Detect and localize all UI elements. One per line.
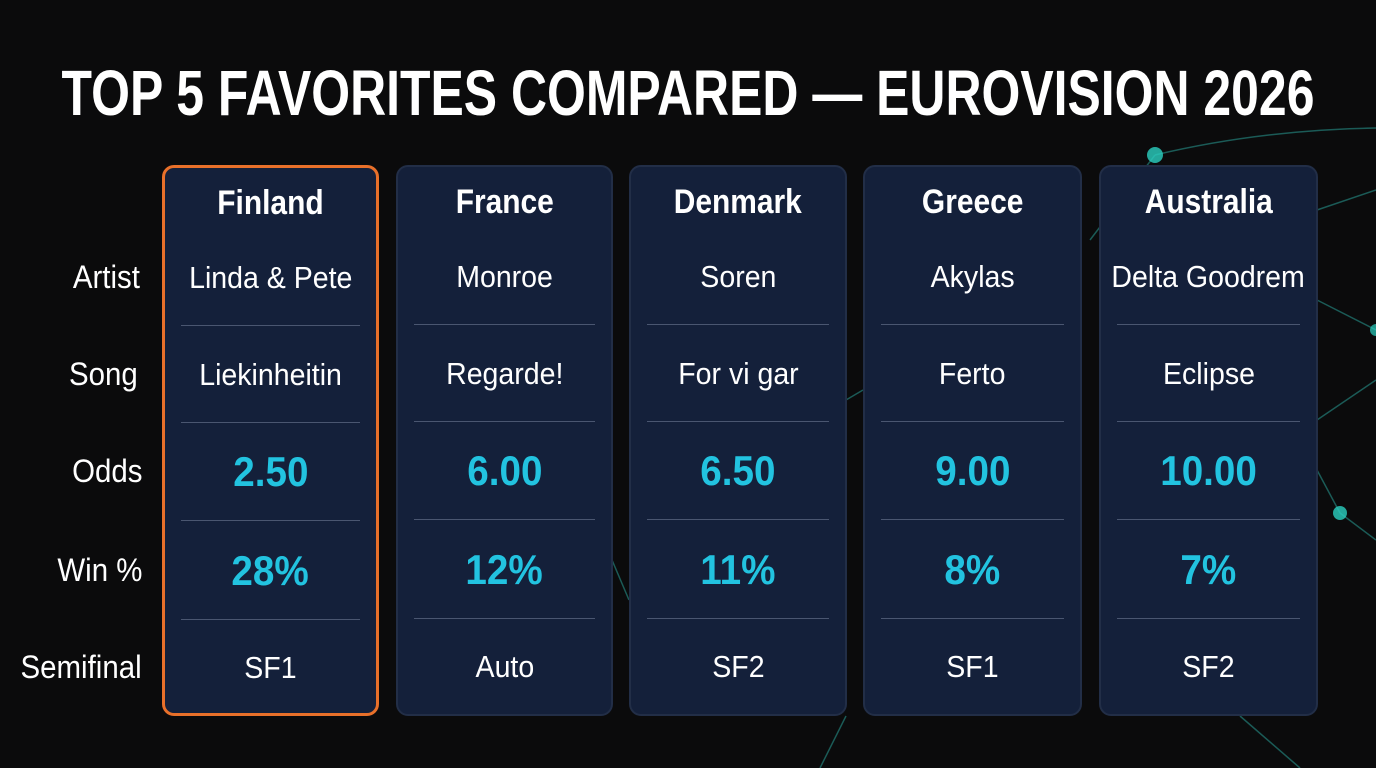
card: France: Monroe [456,259,553,294]
row labels: Odds [72,453,142,489]
card: Greece: Akylas [930,259,1015,294]
card: Finland: Linda & Pete [189,260,352,295]
card: Greece: Greece [922,183,1023,221]
card: Greece: 9.00 [935,447,1010,494]
row labels: Song [69,356,138,392]
card: Australia [1099,165,1318,716]
card: France: 6.00 [467,447,542,494]
card: Finland: Finland [217,184,324,222]
card: France [396,165,613,716]
card: Australia: Australia [1144,183,1273,221]
card: Denmark: Denmark [674,183,802,221]
card: Australia: 10.00 [1160,447,1257,494]
card: France: Auto [475,649,534,684]
card: Finland: Liekinheitin [199,357,342,392]
card: Finland: SF1 [244,650,297,685]
title: TOP 5 FAVORITES COMPARED — EUROVISION 2026 [62,57,1314,129]
card: Denmark: 6.50 [700,447,776,494]
card: Denmark: 11% [700,546,776,593]
card: Greece [863,165,1082,716]
card: Denmark: Soren [700,259,776,294]
card: Finland: 28% [232,547,309,594]
card: Finland [162,165,379,716]
card: France: 12% [466,546,543,593]
card: France: France [455,183,554,221]
card: Australia: Eclipse [1163,356,1254,391]
card: Denmark [629,165,847,716]
card: Greece: 8% [945,546,1000,593]
row labels: Artist [73,259,140,295]
card: Denmark: SF2 [712,649,764,684]
card: Australia: Delta Goodrem [1112,259,1305,294]
card: Australia: SF2 [1182,649,1235,684]
card: Denmark: For vi gar [678,356,798,391]
card: Finland: 2.50 [233,448,308,495]
row labels: Win % [57,552,142,588]
row labels: Semifinal [21,649,142,685]
card: Australia: 7% [1181,546,1236,593]
row labels [21,259,142,685]
card: Greece: Ferto [939,356,1006,391]
card: Greece: SF1 [946,649,999,684]
card: France: Regarde! [446,356,563,391]
